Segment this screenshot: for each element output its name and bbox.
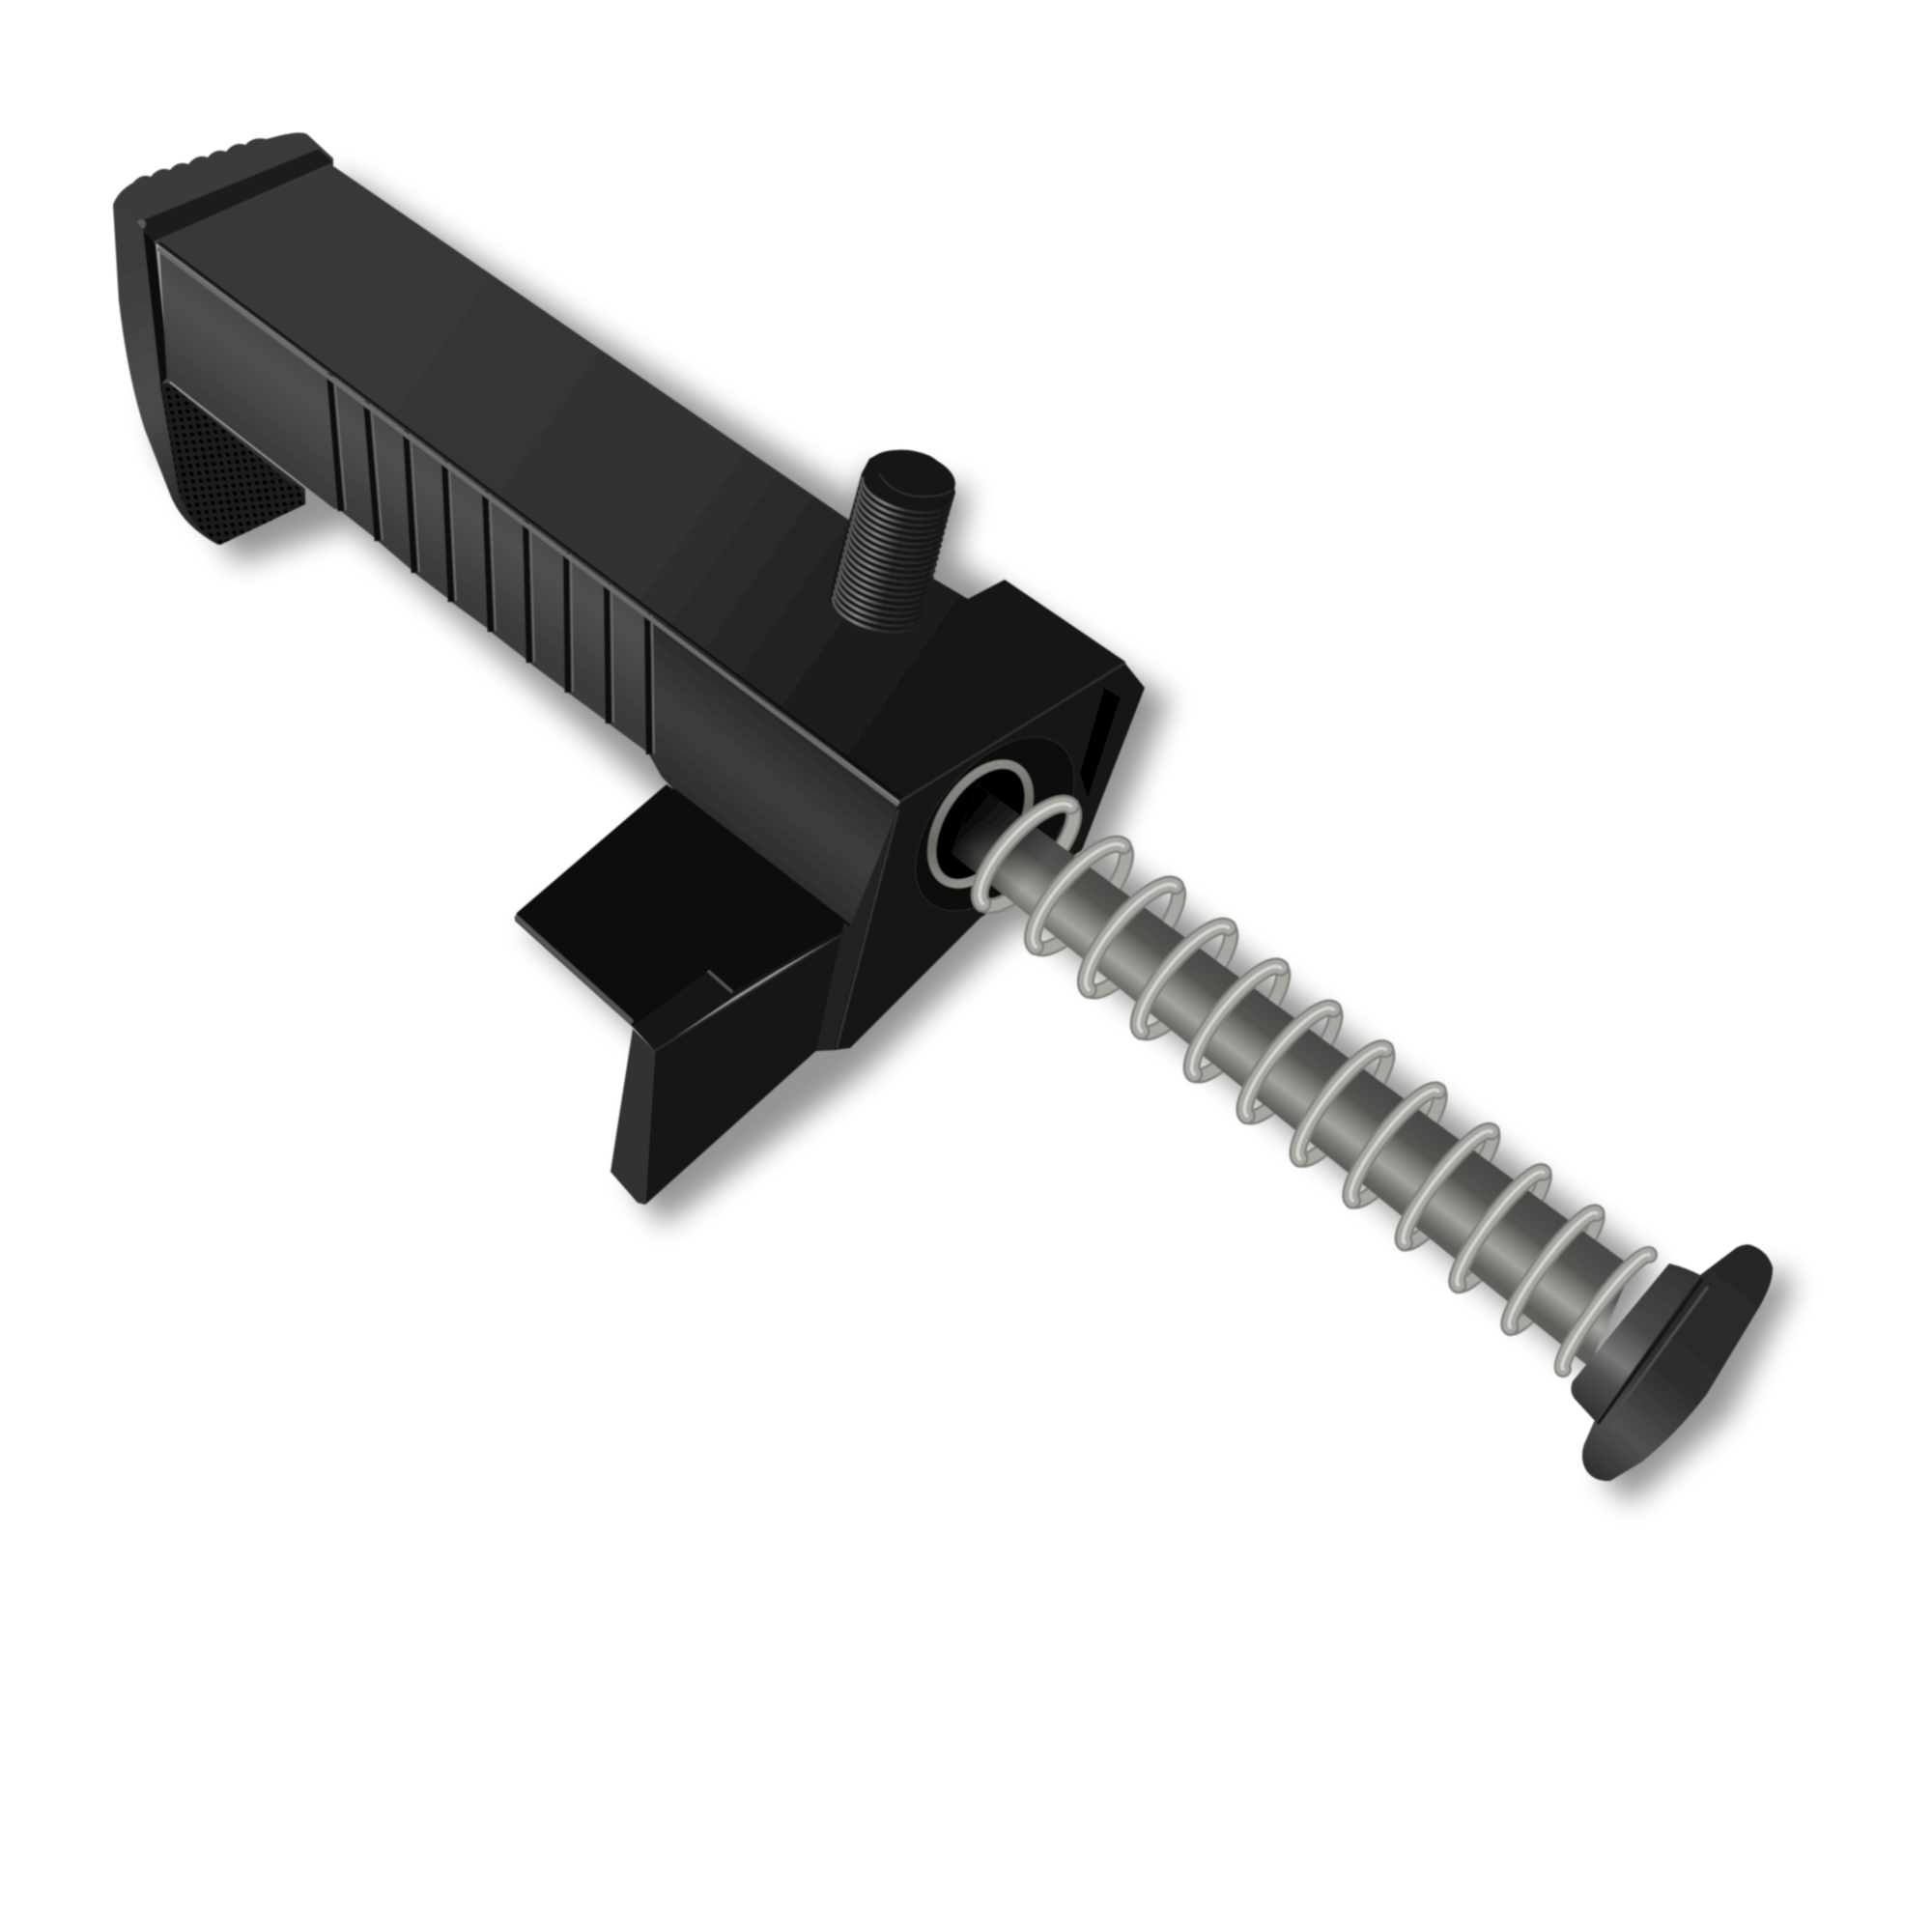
back halves of spring coils xyxy=(982,806,1606,1335)
plunger head xyxy=(1571,1244,1773,1481)
body top face xyxy=(154,166,1125,802)
front edge lines xyxy=(901,663,1125,801)
head flange xyxy=(1582,1244,1773,1481)
top edge highlight xyxy=(157,242,902,805)
bearing hole xyxy=(912,747,1049,901)
cap dark band xyxy=(135,149,333,242)
front face surface xyxy=(834,664,1145,1050)
jaw seam xyxy=(816,804,900,1051)
head neck xyxy=(1571,1264,1700,1422)
block front face xyxy=(834,663,1145,1050)
stud end bevel xyxy=(879,473,952,497)
cap top knurled xyxy=(113,132,333,242)
lower jaw xyxy=(515,784,900,1205)
washer xyxy=(885,708,1105,940)
jaw front face xyxy=(645,929,850,1205)
plunger shaft xyxy=(952,784,1633,1367)
cap grip mesh xyxy=(159,383,305,545)
cap front xyxy=(113,205,305,545)
front halves of spring coils xyxy=(966,790,1649,1369)
head ridge xyxy=(1598,1279,1702,1424)
jaw chamfer xyxy=(655,929,850,1051)
cap dark groove xyxy=(143,230,169,384)
jaw notch xyxy=(708,971,732,992)
artwork xyxy=(113,132,1773,1481)
lower side seam xyxy=(673,789,850,925)
side face end section xyxy=(649,614,900,927)
cap corner highlight xyxy=(136,219,146,229)
drop shadow xyxy=(141,178,1795,1502)
stud base xyxy=(829,450,955,631)
jaw flat top xyxy=(515,784,855,1051)
side face surface xyxy=(159,247,673,789)
threaded stud xyxy=(829,441,961,632)
head ridge highlight xyxy=(1607,1287,1708,1424)
jaw lip highlight xyxy=(517,918,631,1021)
jaw raised band xyxy=(633,925,850,1051)
slot xyxy=(1080,688,1121,798)
stud threads xyxy=(833,477,952,632)
jaw serrated edge xyxy=(611,1029,655,1205)
side grip ribs xyxy=(329,373,654,754)
end cap xyxy=(113,132,333,545)
body side face xyxy=(159,247,900,927)
shaft shading at bearing xyxy=(952,784,1053,911)
stud end face xyxy=(863,441,961,509)
